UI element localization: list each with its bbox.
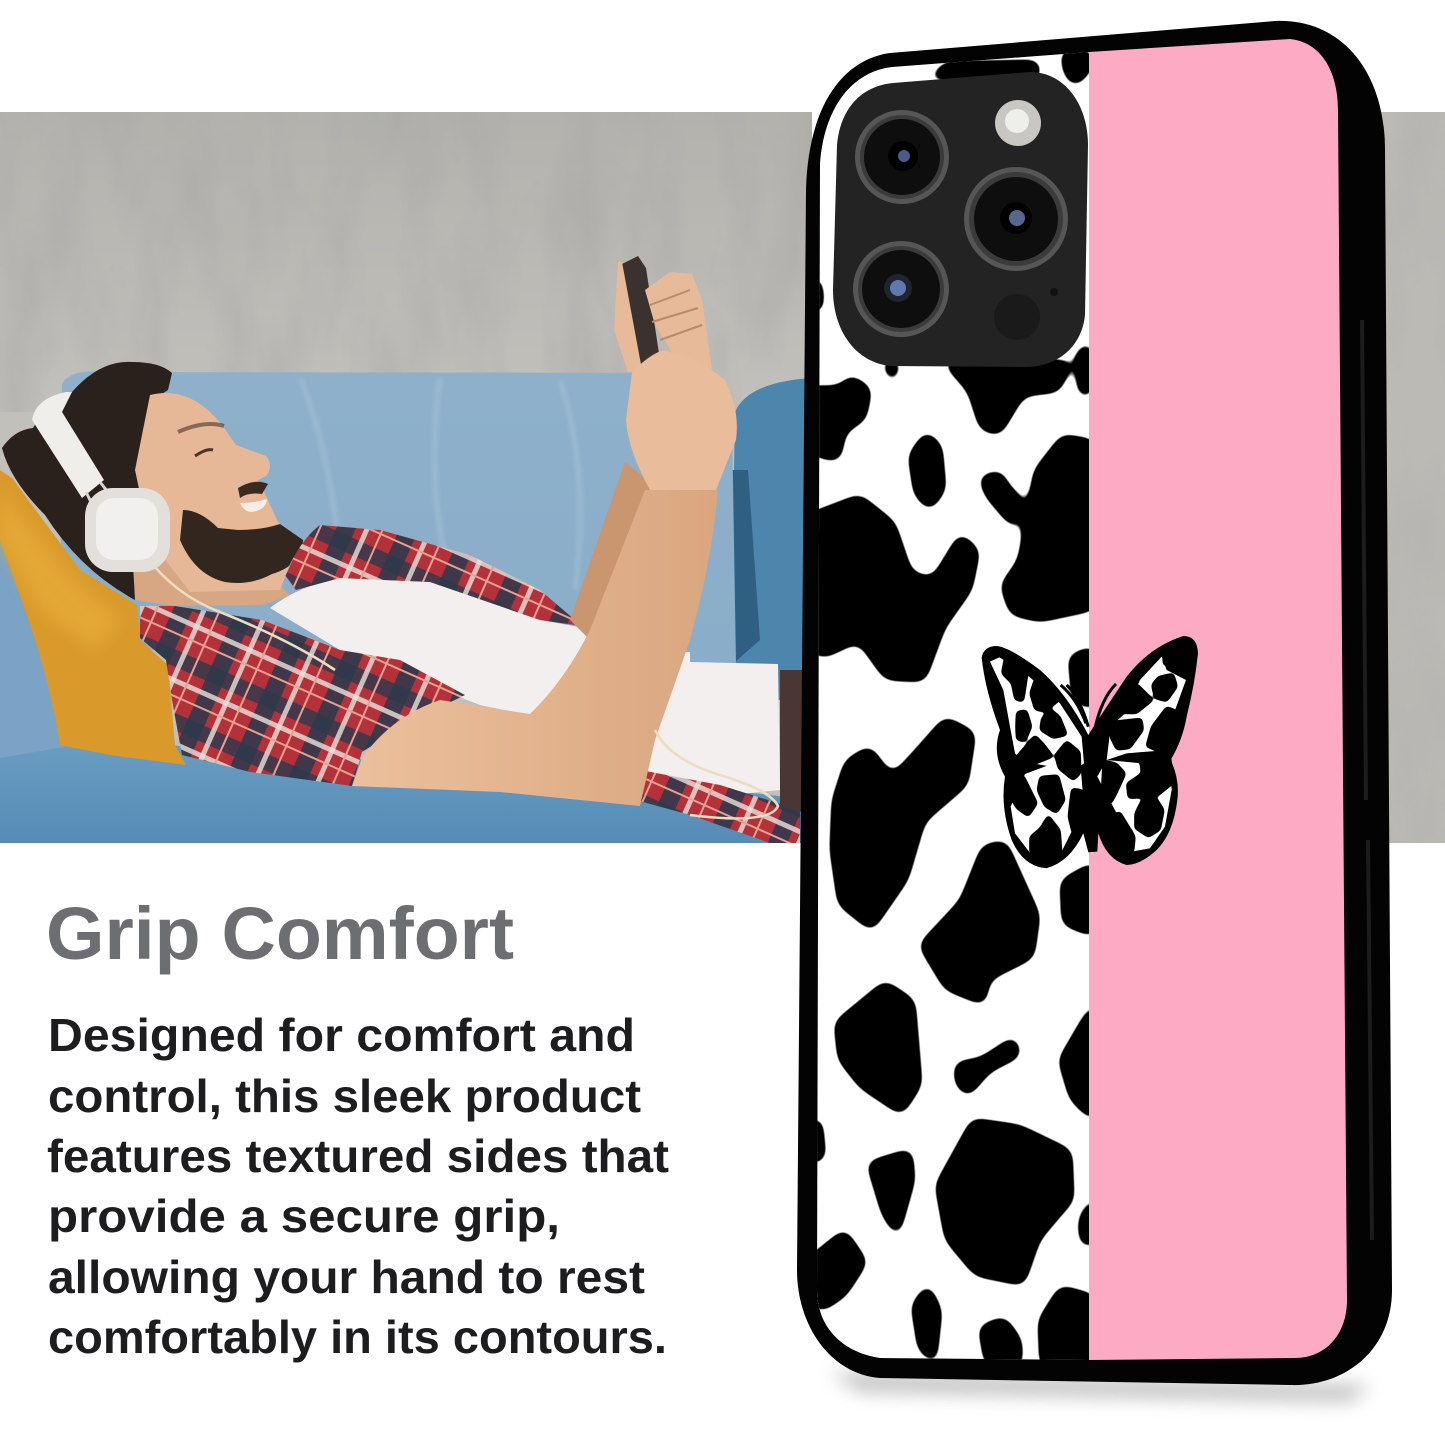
white wing fields xyxy=(990,657,1186,855)
body copy: provide a secure grip, xyxy=(48,1190,560,1242)
case side sheen xyxy=(1362,320,1372,1240)
drop shadow xyxy=(830,1372,1370,1402)
white print area xyxy=(817,52,1090,1360)
beard xyxy=(180,510,303,583)
headphone cable xyxy=(146,556,778,818)
near fist xyxy=(626,351,737,490)
body copy: Designed for comfort and xyxy=(48,1009,635,1061)
camera module xyxy=(833,72,1088,367)
finger creases xyxy=(650,290,702,340)
black case body xyxy=(797,21,1392,1385)
butterfly silhouette xyxy=(982,636,1198,868)
cow pattern xyxy=(805,50,1096,1368)
heading: Grip Comfort xyxy=(46,892,514,975)
butterfly xyxy=(982,636,1198,868)
concrete wall xyxy=(0,112,812,843)
neck xyxy=(133,560,290,606)
pillow shading xyxy=(0,506,113,643)
plaid shirt hem xyxy=(636,770,800,843)
body copy: control, this sleek product xyxy=(48,1070,641,1122)
far hand and fingers xyxy=(614,262,712,372)
body copy xyxy=(47,1009,669,1363)
white t-shirt xyxy=(270,578,780,795)
butterfly antennae xyxy=(1061,684,1116,728)
face xyxy=(135,393,300,592)
trousers xyxy=(780,670,802,812)
headphones xyxy=(32,392,170,572)
body copy: features textured sides that xyxy=(47,1130,669,1182)
eye and brow xyxy=(178,424,224,456)
lens upper left xyxy=(855,110,949,204)
flash xyxy=(995,100,1041,146)
camera island xyxy=(833,72,1088,367)
microphone xyxy=(1050,288,1058,296)
shirt collar plaid xyxy=(285,525,582,626)
cushion fold highlights xyxy=(300,378,580,590)
sofa right arm xyxy=(734,378,804,700)
lens lower left xyxy=(853,241,949,337)
phone case xyxy=(797,21,1392,1402)
near arm xyxy=(352,490,718,806)
sofa seat xyxy=(0,740,812,843)
lidar sensor xyxy=(994,294,1040,340)
phone in hand xyxy=(622,256,660,372)
sofa left arm xyxy=(0,540,67,758)
mustard pillow xyxy=(0,470,186,765)
plaid shirt body and sleeve xyxy=(140,606,465,786)
photo: man relaxing on a sofa with a phone xyxy=(0,112,812,843)
sofa back cushion xyxy=(60,371,736,665)
sofa arm shadow xyxy=(732,470,760,661)
wall strip right of phone xyxy=(1375,112,1445,843)
hair and back of head xyxy=(2,362,172,600)
moustache and smile xyxy=(238,482,268,512)
body copy: comfortably in its contours. xyxy=(48,1311,667,1363)
pink panel xyxy=(1089,39,1347,1360)
far forearm xyxy=(570,462,650,636)
butterfly spots xyxy=(1002,640,1193,863)
body copy: allowing your hand to rest xyxy=(48,1251,645,1303)
lens right xyxy=(964,167,1068,271)
